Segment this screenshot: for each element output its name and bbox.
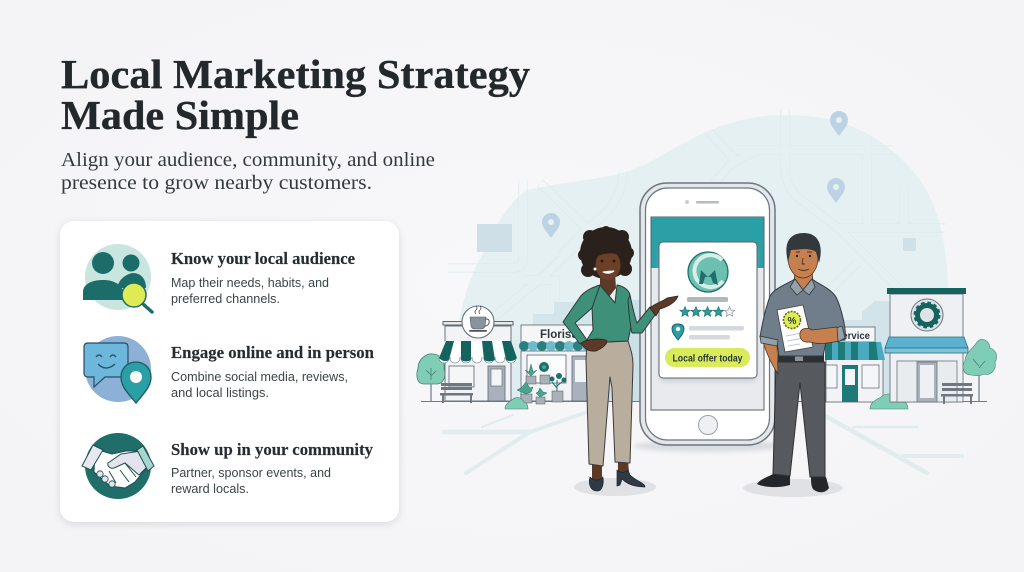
map roads: [448, 110, 945, 320]
description: show up in your community: Partner, sponsor events, and: [171, 466, 331, 480]
bush: [505, 398, 528, 409]
business card: [659, 242, 757, 382]
star rating: [680, 306, 735, 316]
shirt: [760, 279, 845, 356]
hands: [581, 339, 607, 351]
step: engage online and in person: [84, 336, 374, 403]
coffee awning stripes: [439, 341, 517, 362]
description: know your local audience: [171, 276, 329, 306]
bench: [440, 383, 473, 403]
heading: know your local audience: Know your local audience: [171, 249, 355, 268]
neck: [600, 274, 616, 298]
offer pill: Local offer today: [672, 354, 743, 364]
map backdrop: [448, 110, 948, 402]
flower pots: [517, 362, 566, 404]
shoes: [757, 474, 829, 492]
subtitle: Align your audience, community, and online: [61, 149, 435, 171]
phone: [633, 183, 783, 452]
head: [786, 233, 821, 278]
flyer: %: [788, 316, 797, 327]
gear sign: [911, 299, 943, 331]
trousers: [586, 341, 633, 466]
trousers: [773, 362, 825, 477]
description: show up in your community: [171, 466, 331, 496]
belt: [778, 354, 824, 362]
description: engage online and in person: [171, 370, 348, 400]
coffee awning scallops: [439, 353, 516, 363]
icon: audience with magnifier: [83, 244, 152, 312]
phone screen: [651, 217, 764, 410]
collar and cuffs: [760, 279, 845, 346]
hair: [578, 226, 634, 279]
description: know your local audience: preferred channels.: [171, 292, 280, 306]
tree left: [417, 354, 445, 401]
service striped awning: [825, 342, 885, 360]
green top: [563, 285, 655, 344]
shop: coffee: [417, 306, 517, 403]
home button: [698, 416, 718, 434]
step: know your local audience: [83, 244, 355, 312]
flyer: [777, 305, 813, 352]
person: man with flyer: [743, 233, 845, 497]
description: engage online and in person: Combine social media, reviews,: [171, 370, 348, 384]
icon: chat bubble and pin: [84, 336, 151, 403]
location pin: [672, 324, 684, 340]
description: engage online and in person: and local listings.: [171, 386, 269, 400]
person: woman presenting: [563, 226, 678, 496]
coffee sign: [462, 306, 494, 338]
title: Local Marketing Strategy: [61, 51, 531, 97]
face: [594, 250, 620, 280]
subtitle: [61, 149, 435, 194]
subtitle: presence to grow nearby customers.: [61, 172, 372, 194]
shop: gear workshop: [885, 288, 997, 404]
panel: three steps card: [60, 221, 399, 522]
florist scalloped awning: [519, 341, 592, 351]
description: know your local audience: Map their needs, habits, and: [171, 276, 329, 290]
title: [61, 51, 531, 138]
right hand and forearm: [800, 327, 838, 344]
ground line: [421, 400, 987, 402]
step: show up in your community: [82, 433, 374, 499]
ankles and shoes: [589, 460, 645, 491]
heading: show up in your community: Show up in your community: [171, 440, 374, 459]
heading: engage online and in person: Engage online and in person: [171, 343, 374, 362]
icon: handshake: [82, 433, 154, 499]
tree right: [963, 340, 997, 402]
description: show up in your community: reward locals.: [171, 482, 249, 496]
bush right: [870, 394, 908, 409]
shop: florist: [505, 325, 595, 409]
bench right: [941, 383, 973, 404]
logo: [688, 252, 728, 292]
service sign text: Service: [836, 330, 870, 342]
title: Made Simple: [61, 92, 299, 138]
shop: service: [825, 327, 908, 409]
florist sign text: Florist: [540, 329, 575, 341]
ground street markings: [444, 412, 962, 473]
gear shop awning: [885, 337, 968, 353]
neck and left forearm: [763, 270, 813, 374]
map pins: [542, 111, 848, 238]
